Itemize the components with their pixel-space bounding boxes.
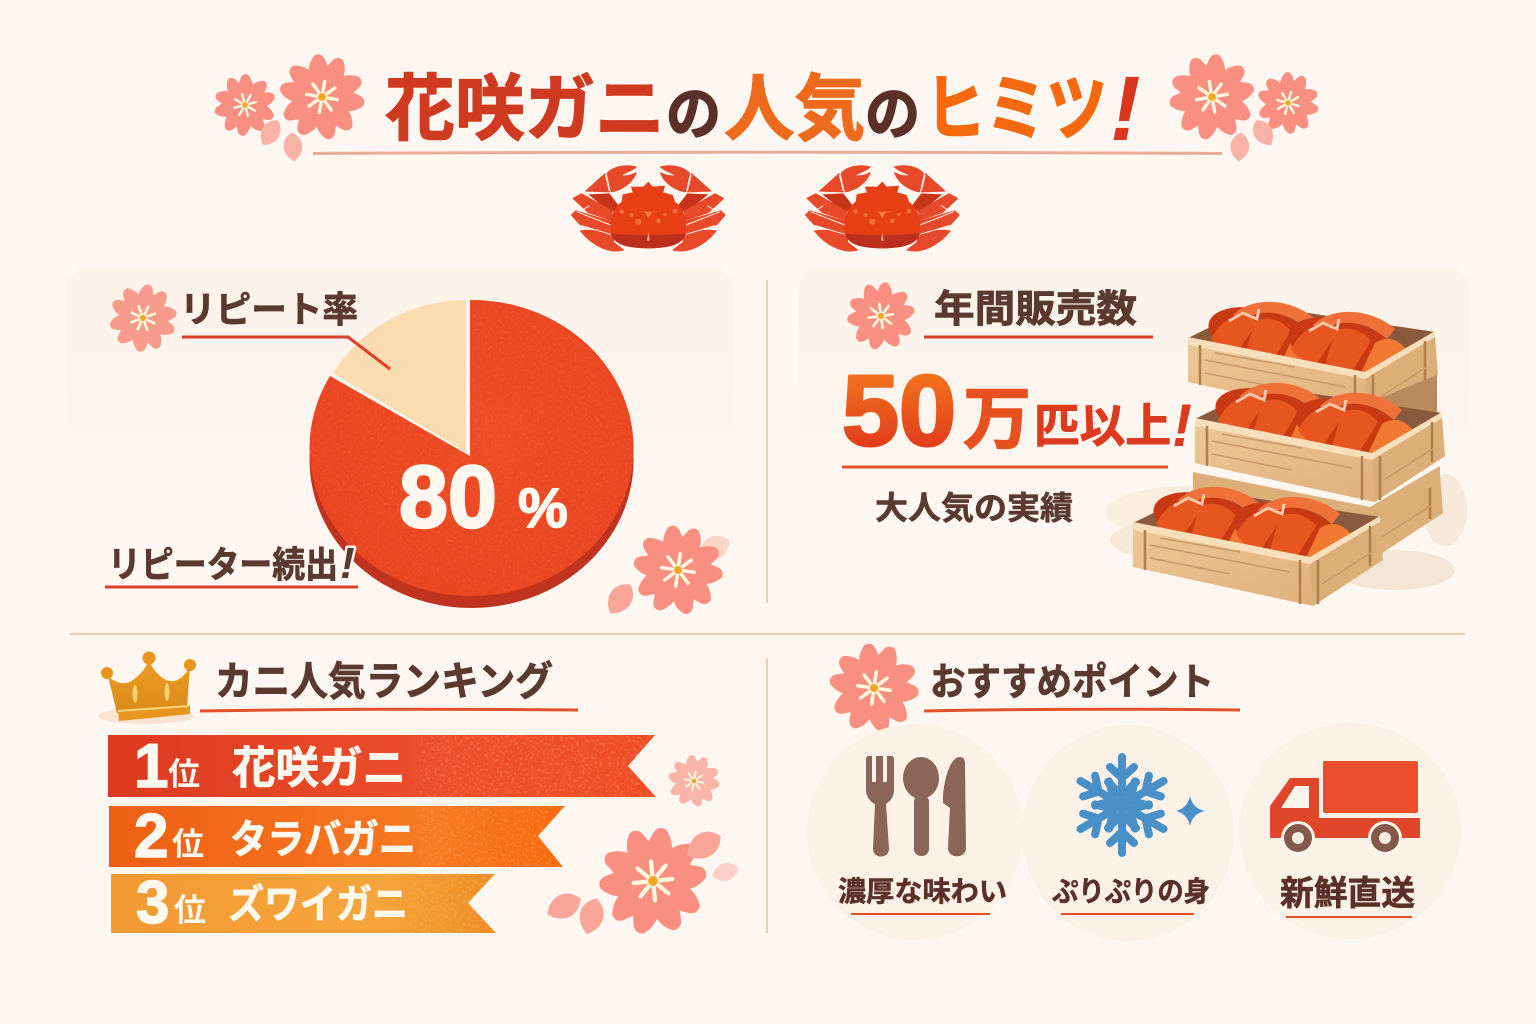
front crate (1133, 481, 1383, 606)
title (385, 58, 1141, 160)
icon: sparkle (1176, 796, 1205, 826)
icon: cutlery (866, 756, 966, 856)
middle crate (1195, 377, 1445, 502)
title: 花咲ガニ (385, 70, 665, 150)
pie chart: repeat rate (310, 300, 634, 608)
icon: small flower ranking (663, 752, 725, 812)
pie chart: repeat rate: % (518, 476, 568, 539)
point: plump meat (1022, 725, 1234, 941)
title: ! (1110, 58, 1141, 160)
big number: 500k+ (842, 355, 1192, 467)
ribbon: rank 2: 2 (134, 802, 168, 871)
divider horizontal (70, 633, 1465, 635)
heading: annual sales: 年間販売数 (934, 289, 1137, 331)
callout: repeaters: ! (340, 539, 355, 588)
point: fresh direct delivery (1239, 723, 1461, 939)
ribbon: rank 1 (108, 732, 656, 801)
icon: snowflake (1073, 757, 1171, 853)
top crate (1188, 296, 1438, 421)
icon: truck (1270, 761, 1420, 855)
point: plump meat: ぷりぷりの身 (1052, 876, 1210, 907)
ribbon: rank 2 (109, 802, 565, 871)
crates of crab (1105, 296, 1467, 606)
icon: flower repeat rate (96, 273, 189, 365)
lower back crate (1193, 466, 1443, 559)
big number: 500k+: ! (1172, 392, 1192, 459)
ribbon: rank 2: 位 (172, 826, 204, 862)
big number: 500k+: 50 (842, 355, 956, 467)
icon: big flower ranking (542, 823, 741, 942)
icon: flower annual sales (841, 279, 921, 355)
underline: number (842, 466, 1168, 468)
title: 人気 (724, 70, 865, 150)
ribbon: rank 2: タラバガニ (230, 818, 416, 862)
point: rich flavor (807, 724, 1023, 940)
icon: flower recommendation (821, 639, 927, 740)
divider vertical bottom (766, 658, 768, 933)
title: ヒミツ (925, 70, 1107, 150)
point: rich flavor: 濃厚な味わい (838, 876, 1007, 907)
icon: crab left (572, 166, 725, 251)
heading: repeat rate: リピート率 (180, 289, 358, 330)
big number: 500k+: 匹以上 (1034, 400, 1171, 452)
ribbon: rank 1: 花咲ガニ (232, 744, 406, 793)
icon: title flowers right (1161, 48, 1327, 162)
point: fresh direct delivery: 新鮮直送 (1280, 875, 1415, 913)
text: track record: 大人気の実績 (875, 490, 1073, 526)
callout: repeaters: リピーター続出 (108, 544, 338, 585)
panel: annual sales background (799, 266, 1470, 620)
ribbon: rank 1: 位 (168, 756, 200, 792)
ribbon: rank 3: 3 (136, 869, 169, 936)
panel: repeat rate background (66, 266, 734, 620)
ribbon: rank 3 (111, 869, 496, 936)
ribbon: rank 3: ズワイガニ (228, 883, 408, 927)
ribbon: rank 1: 1 (134, 732, 168, 801)
divider vertical top (766, 280, 768, 603)
icon: crab right (806, 166, 959, 251)
heading: recommendation points: おすすめポイント (930, 662, 1214, 704)
icon: flowers by pie (601, 521, 735, 622)
icon: title flowers left (206, 48, 373, 162)
pie chart: repeat rate: 80 (399, 447, 497, 546)
heading: repeat rate (180, 289, 390, 369)
title underline (313, 152, 1222, 154)
title: の (865, 82, 920, 147)
heading: crab ranking: カニ人気ランキング (215, 660, 553, 704)
icon: crown (98, 652, 196, 724)
title: の (666, 82, 721, 147)
big number: 500k+: 万 (963, 382, 1031, 458)
ribbon: rank 3: 位 (174, 892, 206, 928)
